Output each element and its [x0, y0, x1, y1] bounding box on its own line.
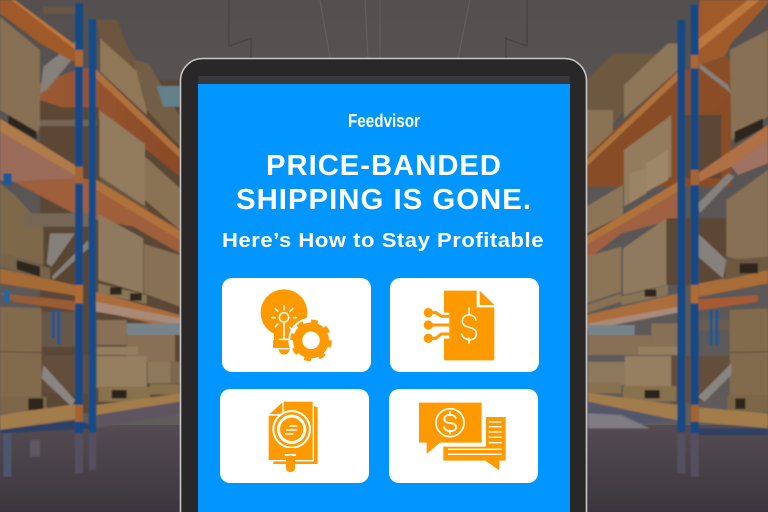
headline: SHIPPING IS GONE.: [236, 184, 532, 216]
tablet frame: [180, 58, 586, 512]
card: document with dollar and circuit: [390, 278, 539, 372]
ceiling fixtures and panel lines: [229, 0, 527, 58]
card: lightbulb and gear: [222, 278, 371, 372]
headline: PRICE-BANDED: [266, 150, 502, 182]
icon: lightbulb with gear: [261, 289, 334, 363]
brand logo: Feedvisor: [348, 111, 420, 131]
headline: [236, 150, 532, 216]
left warehouse shelving: [0, 0, 180, 477]
tablet device: [180, 58, 586, 512]
card: chat bubbles with dollar: [389, 389, 538, 483]
tablet top bar: [198, 76, 570, 86]
icon: magnifier over document: [269, 402, 318, 472]
icon: dollar document with circuit: [424, 291, 494, 360]
warehouse floor: [0, 425, 768, 512]
tablet blue screen: [198, 84, 570, 512]
icon: speech bubbles with dollar: [419, 403, 506, 470]
right warehouse shelving: [586, 0, 768, 477]
card: document with magnifier: [220, 389, 369, 483]
subheading: Here’s How to Stay Profitable: [222, 230, 544, 252]
